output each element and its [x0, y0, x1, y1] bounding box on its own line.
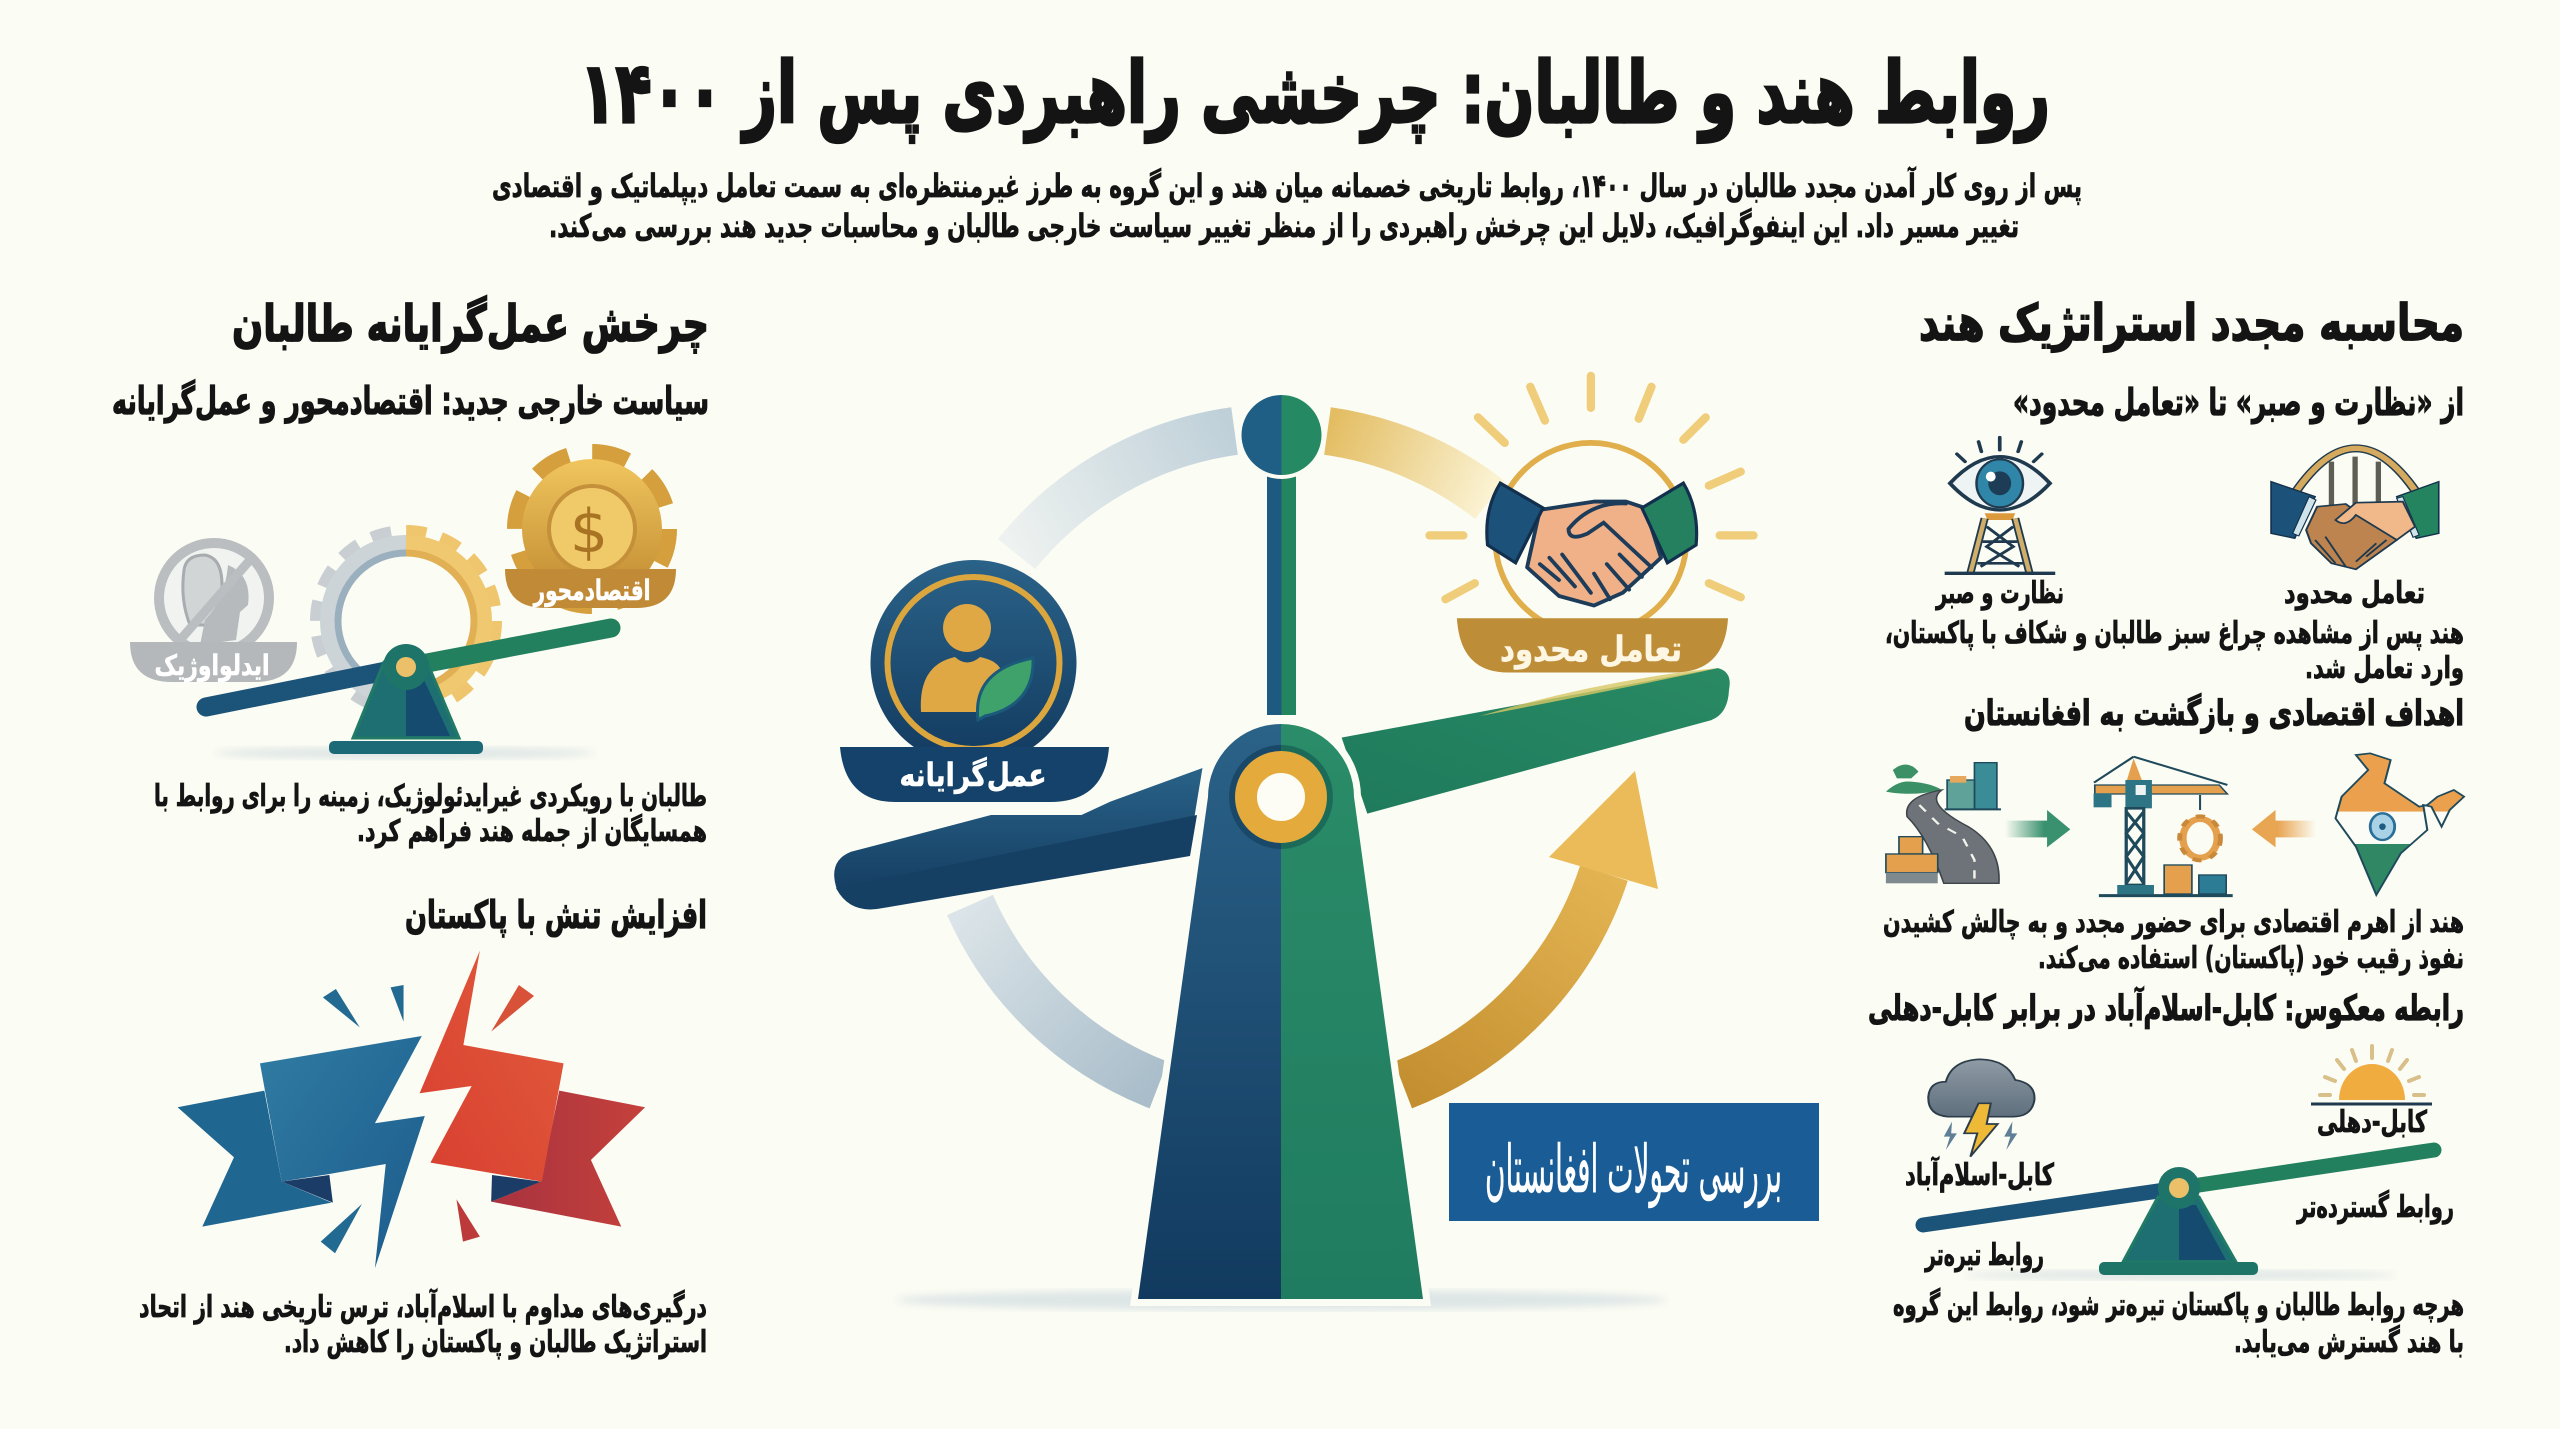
seesaw: inverse relations [1923, 1150, 2434, 1280]
icon: gold economy gear [505, 453, 676, 608]
text: India after green light [1885, 616, 2464, 686]
arrow: gold rising arc [1403, 771, 1658, 1085]
text: بررسی تحولات افغانستان [1485, 1131, 1782, 1208]
text: clashes with Islamabad: درگیری‌های مداوم با اسلام‌آباد، ترس تاریخی هند از اتحاد [139, 1288, 707, 1325]
icon: road and city [1886, 763, 2001, 883]
icon: torn ribbons with lightning [178, 951, 645, 1268]
text: the darker the ties: با هند گسترش می‌یابد. [2234, 1324, 2464, 1360]
hub [1229, 745, 1333, 849]
ring arc: top left gray [1016, 431, 1234, 554]
heading: tension with Pakistan: افزایش تنش با پاکستان [405, 893, 707, 937]
icon: crossed-out ideology [130, 543, 297, 682]
illustration: ideology vs economy seesaw [130, 453, 676, 759]
ring arc: bottom left gray [970, 905, 1159, 1085]
icon: bridge handshake [2271, 448, 2439, 569]
text: clashes with Islamabad [139, 1288, 707, 1360]
intro text [492, 166, 2082, 245]
label: Kabul-Delhi: کابل-دهلی [2317, 1105, 2427, 1140]
icon: gold economy gear: $ [570, 497, 608, 567]
icon: crossed-out ideology: ایدلواوژیک [154, 649, 270, 682]
panel: left column [112, 295, 709, 1360]
text: economic leverage [1883, 905, 2464, 976]
stem and top knob [1238, 391, 1326, 715]
icon: construction crane [2094, 757, 2233, 896]
icon: sunrise [2311, 1046, 2432, 1104]
label: watch and patience: نظارت و صبر [1935, 576, 2064, 611]
icon: green arrow [2005, 810, 2070, 847]
text: the darker the ties [1893, 1287, 2464, 1360]
sun rays [1430, 376, 1754, 599]
icon: pragmatic badge [840, 560, 1109, 802]
label: broader relations: روابط گسترده‌تر [2296, 1189, 2454, 1225]
label: limited engagement: تعامل محدود [2284, 576, 2425, 611]
icon: watch tower eye [1945, 437, 2055, 573]
panel: right column [1868, 294, 2466, 1360]
text: India after green light: وارد تعامل شد. [2305, 651, 2464, 686]
logo box [1449, 1103, 1819, 1221]
heading: pragmatic turn: چرخش عمل‌گرایانه طالبان [232, 295, 709, 354]
ring arc: top right gold [1328, 431, 1490, 500]
icon: gold economy gear: اقتصادمحور [532, 574, 650, 607]
icon: middle gear [317, 532, 495, 710]
label: Kabul-Islamabad: کابل-اسلام‌آباد [1905, 1156, 2054, 1193]
icon: pragmatic badge: عمل‌گرایانه [900, 756, 1046, 794]
text: Taliban non-ideological approach: همسایگان از جمله هند فراهم کرد. [357, 813, 707, 849]
icon: storm cloud [1928, 1059, 2034, 1157]
central post [1138, 724, 1423, 1299]
icon: limited engagement handshake with sun: تعامل محدود [1500, 630, 1682, 670]
subheading: new foreign policy: سیاست خارجی جدید: اقتصادمحور و عمل‌گرایانه [112, 379, 709, 424]
label: darker relations: روابط تیره‌تر [1924, 1238, 2044, 1273]
right beam [1339, 666, 1732, 816]
icon: orange arrow [2252, 810, 2316, 847]
text: Taliban non-ideological approach [154, 779, 707, 849]
panel: central balance scale [832, 376, 1819, 1310]
text: Taliban non-ideological approach: طالبان با رویکردی غیرایدئولوژیک، زمینه را برای روابط با [154, 779, 707, 814]
icon: India map [2331, 750, 2466, 897]
intro text: پس از روی کار آمدن مجدد طالبان در سال ۱۴۰۰، روابط تاریخی خصمانه میان هند و این گروه به طرز غیرمنتظره‌ای به سمت تعامل دیپلماتیک و اقتصادی [492, 166, 2082, 205]
seesaw beam [206, 628, 611, 754]
text: clashes with Islamabad: استراتژیک طالبان و پاکستان را کاهش داد. [284, 1325, 707, 1360]
left beam [832, 765, 1205, 910]
icon: limited engagement handshake with sun [1430, 376, 1754, 673]
ground shadow [896, 1290, 1666, 1310]
